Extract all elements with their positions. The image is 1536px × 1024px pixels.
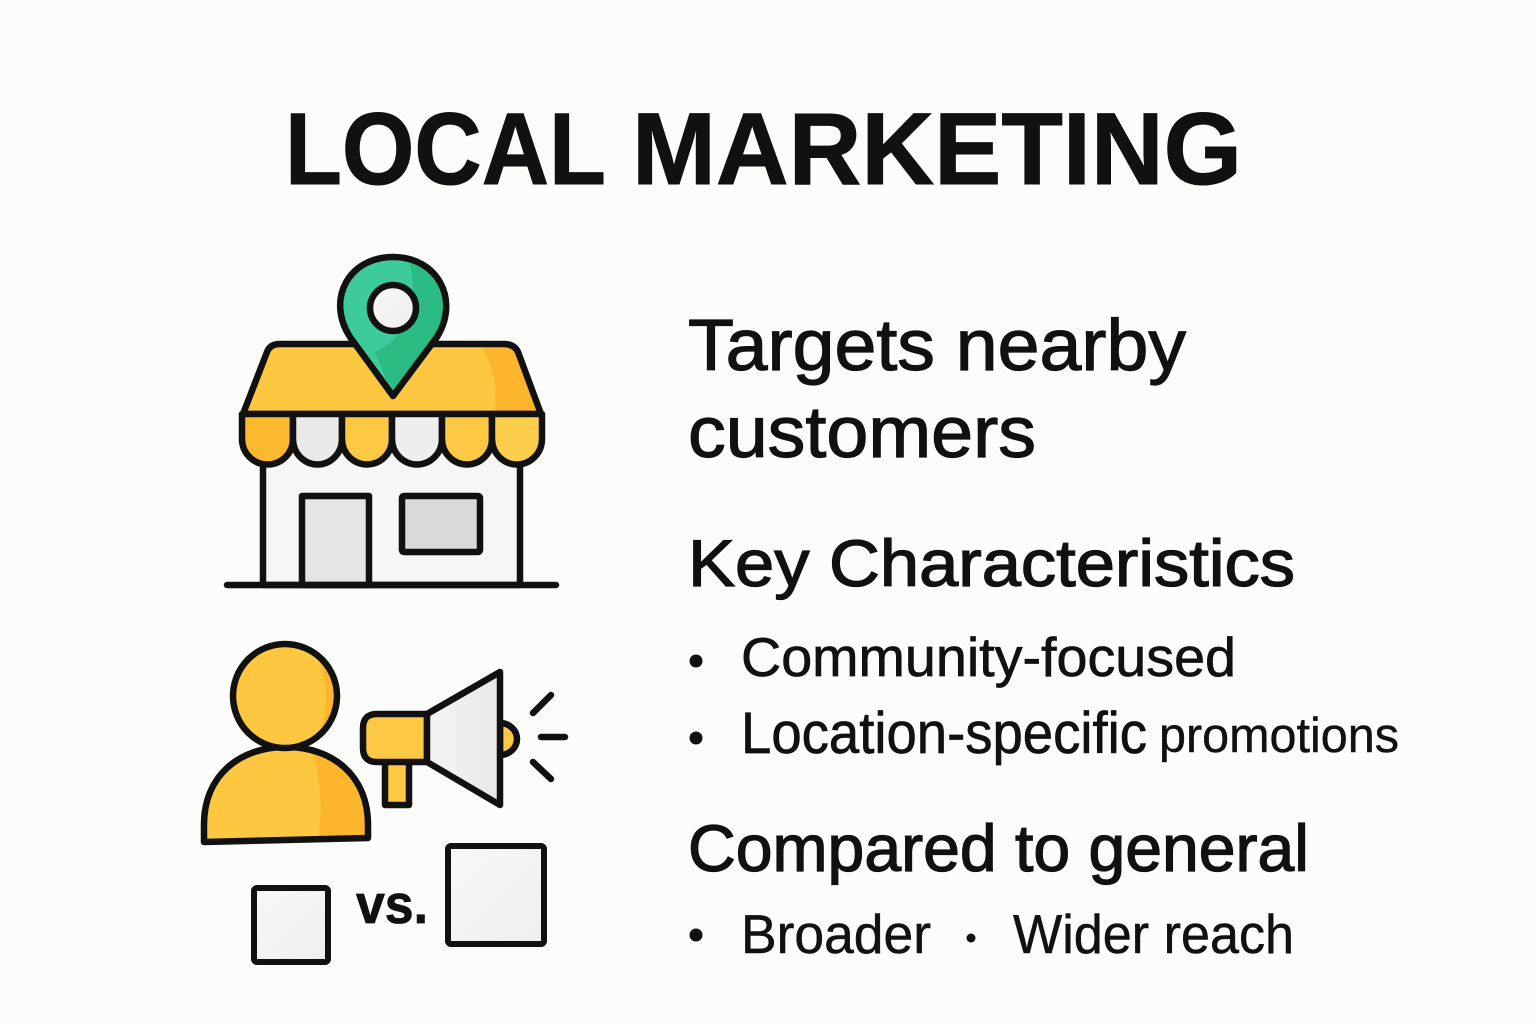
bullet — [690, 654, 702, 668]
awning scallops — [242, 414, 542, 464]
megaphone grip — [363, 714, 427, 762]
ground line — [227, 582, 556, 588]
text: targets nearby customers: customers — [688, 393, 1036, 473]
vs label: vs. — [356, 873, 428, 935]
list: characteristics — [690, 626, 1399, 766]
list: characteristics: promotions — [1159, 709, 1399, 763]
megaphone cone — [427, 672, 500, 805]
heading: compared to general: Compared to general — [688, 811, 1309, 885]
icon: storefront with location pin — [227, 257, 556, 585]
megaphone tip — [500, 723, 517, 755]
small square — [254, 888, 328, 962]
heading: key characteristics: Key Characteristics — [688, 526, 1295, 600]
bullet — [690, 928, 702, 942]
list: comparison: Wider reach — [1013, 903, 1294, 965]
person head — [233, 644, 340, 748]
megaphone handle — [385, 760, 409, 805]
sound lines — [533, 695, 565, 779]
title: LOCAL — [285, 92, 606, 206]
list: comparison: Broader — [741, 903, 931, 965]
large square — [448, 846, 544, 944]
title — [285, 92, 1242, 206]
list: characteristics: Location-specific — [741, 701, 1147, 766]
list: comparison — [690, 903, 1294, 965]
location pin — [340, 257, 446, 396]
text: targets nearby customers: Targets nearby — [688, 306, 1186, 386]
pin centre — [370, 285, 416, 331]
icon: person with megaphone — [204, 644, 565, 842]
shop building — [263, 440, 520, 585]
text: targets nearby customers — [688, 306, 1186, 473]
shop door — [302, 496, 369, 585]
person body — [204, 747, 370, 842]
shop window — [402, 496, 480, 552]
bullet — [690, 732, 702, 744]
awning roof — [243, 344, 541, 414]
title: MARKETING — [632, 92, 1242, 206]
list: characteristics: Community-focused — [741, 626, 1236, 688]
bullet — [966, 934, 976, 942]
